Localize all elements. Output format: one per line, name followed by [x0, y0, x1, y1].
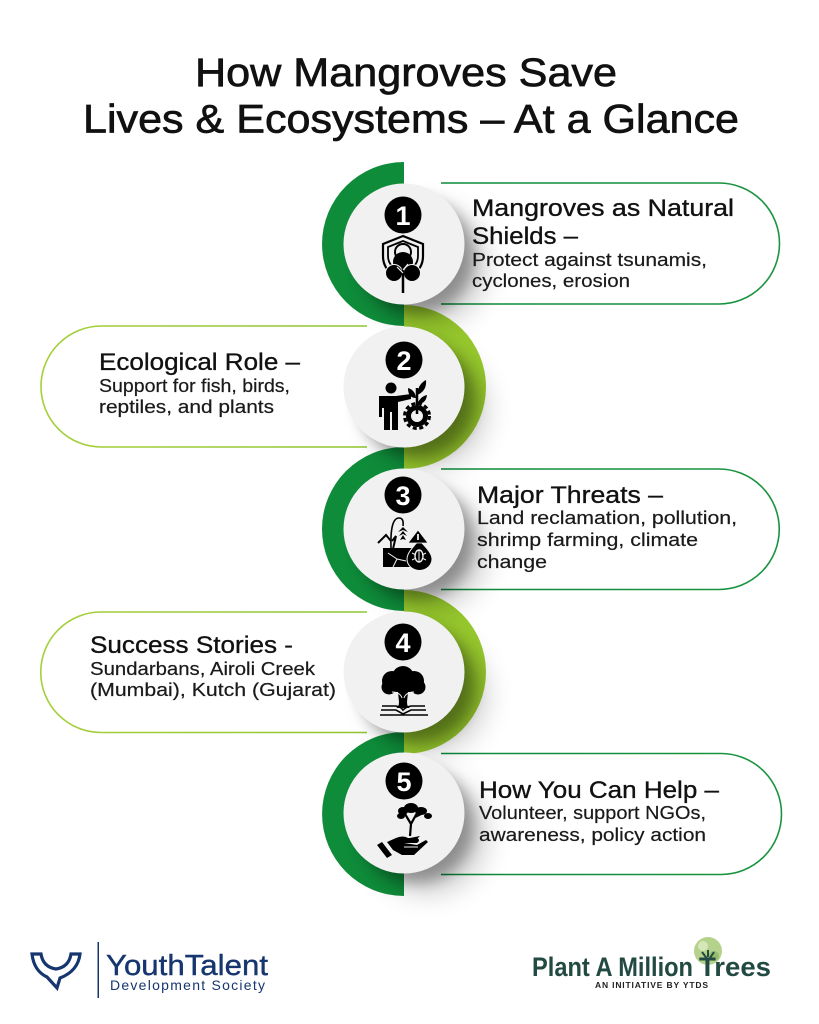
icon: person with gear and sprout	[379, 380, 430, 430]
text: item 3: Major Threats –	[477, 482, 663, 509]
circle shadows	[358, 198, 486, 893]
text: item 5: How You Can Help –	[479, 777, 719, 804]
text: item 1: Mangroves as Natural	[472, 195, 734, 222]
panel: item 5 outline	[441, 754, 781, 874]
number badge 3: 3	[395, 481, 411, 511]
logo: Plant A Million Trees: Plant A Million	[532, 952, 693, 982]
icon: hand holding a sapling	[377, 803, 432, 858]
number badge 4: 4	[395, 628, 411, 658]
logo: Youth Talent Development Society	[32, 942, 268, 998]
text: item 2: reptiles, and plants	[99, 397, 274, 417]
text: item 1: cyclones, erosion	[472, 271, 630, 291]
text: item 1	[472, 195, 734, 291]
panel: item 1 outline	[441, 183, 780, 304]
text: item 3	[477, 482, 737, 572]
text: item 3: shrimp farming, climate	[477, 530, 698, 550]
panel: item 2 outline	[41, 326, 367, 447]
panel: item 4 outline	[41, 612, 367, 732]
text: item 5	[479, 777, 719, 845]
item 1 circle and icon	[344, 184, 464, 304]
logo: Plant A Million Trees	[532, 937, 771, 990]
ribbon: connecting green arcs	[322, 162, 486, 896]
logo: Plant A Million Trees: AN INITIATIVE BY YTDS	[595, 980, 708, 990]
item 5 circle and icon	[344, 752, 464, 874]
text: item 3: change	[477, 552, 547, 572]
text: item 4: Success Stories -	[90, 632, 293, 659]
number badge 5: 5	[396, 767, 412, 797]
text: item 1: Shields –	[472, 223, 578, 250]
logo: Youth Talent Development Society: Development Society	[110, 977, 265, 993]
panel: item 3 outline	[441, 469, 779, 590]
icon: tree growing from open book	[380, 666, 428, 715]
item 3 circle and icon	[344, 468, 464, 590]
icon: tree crown	[694, 937, 722, 976]
title: Lives & Ecosystems – At a Glance	[83, 98, 739, 142]
text: item 5: awareness, policy action	[479, 825, 706, 845]
icon: threats to land, crops and water	[378, 518, 432, 570]
text: item 2: Ecological Role –	[99, 349, 300, 376]
text: item 4: (Mumbai), Kutch (Gujarat)	[90, 680, 336, 700]
text: item 2: Support for fish, birds,	[99, 376, 290, 396]
title: How Mangroves Save	[195, 51, 617, 95]
number badge 1: 1	[395, 201, 411, 231]
icon: speech-bubble Y mark	[32, 954, 80, 988]
item 4 circle and icon	[344, 612, 464, 732]
logo: Youth Talent Development Society: YouthTalent	[106, 950, 268, 982]
text: item 4	[90, 632, 336, 700]
title	[83, 51, 739, 142]
text: item 3: Land reclamation, pollution,	[477, 508, 737, 528]
number badge 2: 2	[396, 346, 412, 376]
text: item 5: Volunteer, support NGOs,	[479, 803, 706, 823]
icon: shield with tree	[383, 236, 423, 293]
logo: Plant A Million Trees: Trees	[699, 952, 771, 982]
text: item 1: Protect against tsunamis,	[472, 250, 707, 270]
text: item 2	[99, 349, 300, 417]
text: item 4: Sundarbans, Airoli Creek	[90, 659, 316, 679]
item 2 circle and icon	[344, 326, 464, 448]
